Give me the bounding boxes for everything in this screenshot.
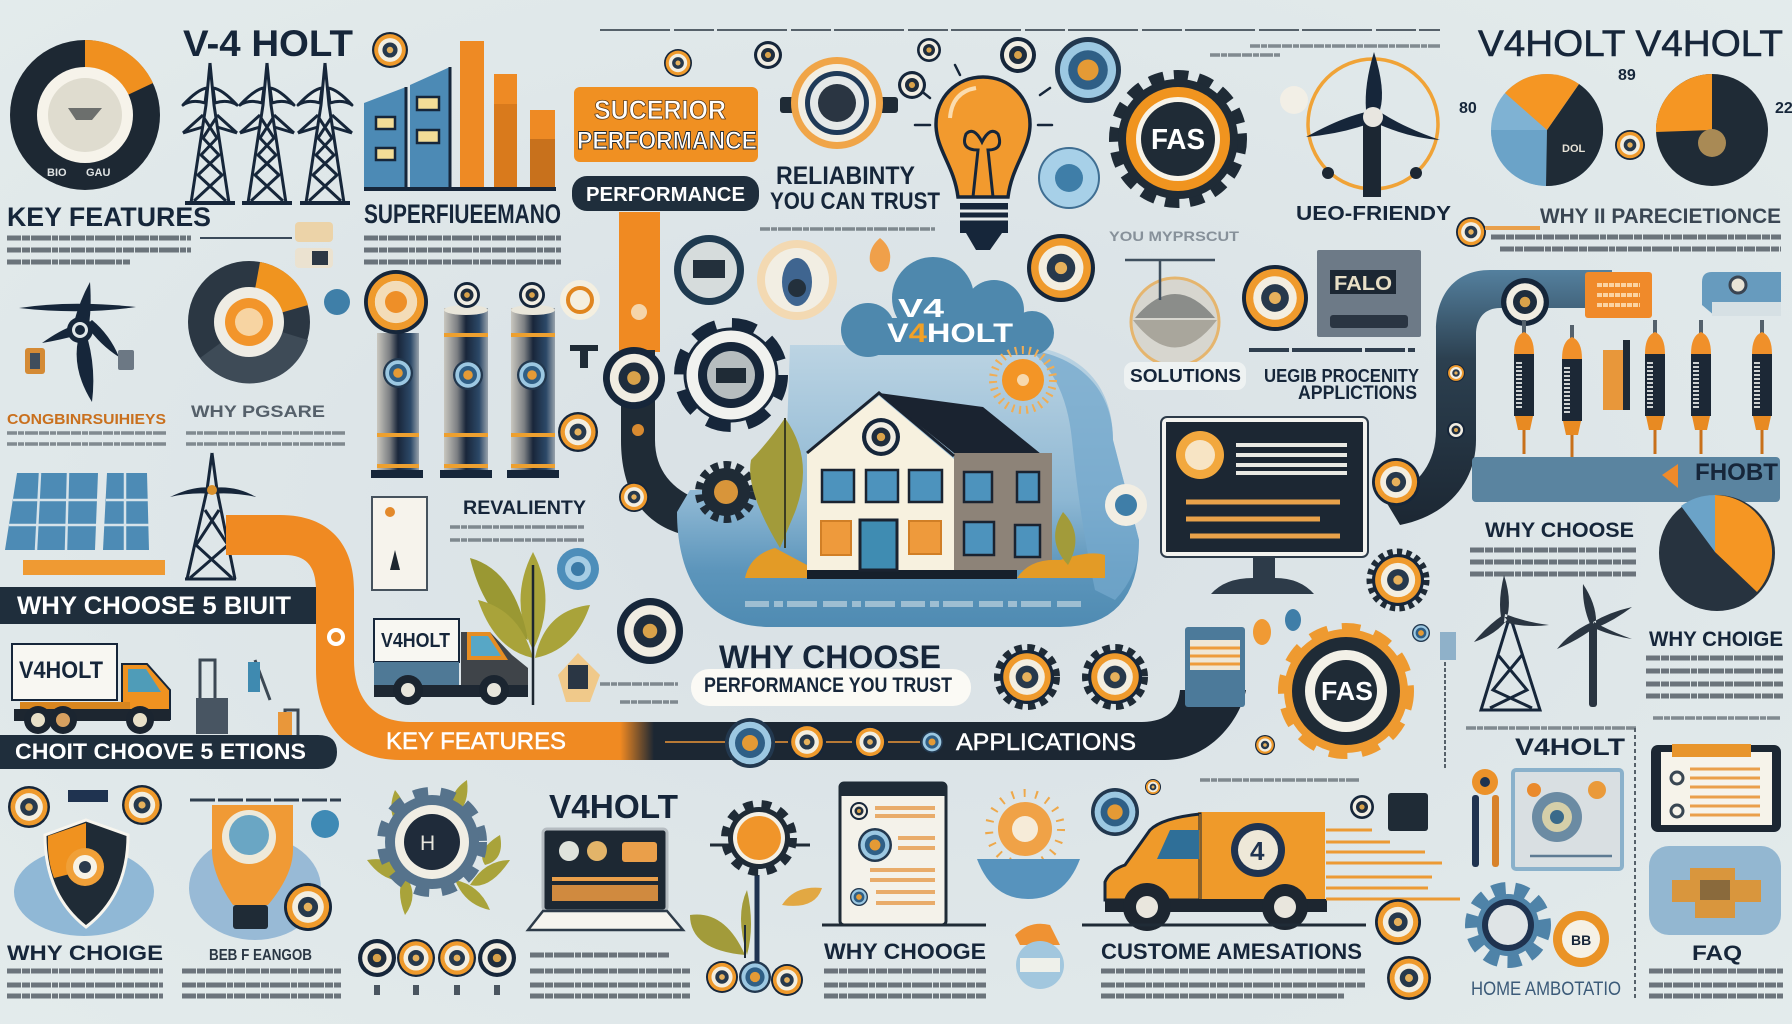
panel: shield — [8, 785, 162, 936]
arrow road: left dark curve — [621, 350, 700, 537]
panel: house background — [677, 345, 1139, 627]
icon: truck orange — [12, 644, 170, 734]
icon: FAS gear big — [1284, 629, 1408, 753]
heading: user applications — [1264, 366, 1419, 404]
heading: user applications: APPLICTIONS — [1298, 383, 1417, 404]
chart: pie three — [1659, 495, 1775, 611]
icon: road circles — [665, 718, 943, 768]
heading: why predictions — [1456, 205, 1781, 247]
chart: pie one: DOL — [1562, 143, 1586, 155]
panel: FALO box: FALO — [1334, 273, 1392, 295]
icon: house — [807, 393, 1052, 579]
heading: why choige left: WHY CHOIGE — [7, 942, 163, 965]
panel: superior block: PERFORMANCE — [577, 127, 757, 155]
icon: delivery van — [1082, 812, 1460, 931]
icon: plant — [470, 552, 590, 705]
icon: road marker — [327, 628, 345, 646]
icon: fuses row — [1514, 320, 1772, 459]
heading: V4HOLT V4HOLT: V4HOLT V4HOLT — [1478, 23, 1783, 64]
icon: light bulb — [915, 65, 1052, 250]
icon: ground shrubs — [745, 512, 1105, 578]
text block: laptop caption — [530, 955, 690, 996]
heading: why choose right: WHY CHOOSE — [1485, 519, 1634, 542]
text block: minor top notes — [1200, 46, 1440, 780]
chart: pie two — [1656, 74, 1768, 186]
panel: blue framed — [1513, 770, 1622, 869]
icon: top-right turbine — [1280, 52, 1440, 197]
icon: tools — [1472, 769, 1499, 867]
heading: V4HOLT small: V4HOLT — [1515, 734, 1625, 761]
icon: orange gear with stem — [710, 806, 810, 964]
label: solutions — [1124, 362, 1246, 390]
road gradient join — [620, 722, 654, 760]
panel: gear with leaves — [367, 780, 510, 915]
pill: performance: PERFORMANCE — [586, 184, 745, 206]
chart labels: numbers — [1459, 67, 1792, 160]
tag: orange — [1585, 272, 1652, 318]
icon: laptop — [528, 829, 683, 930]
icon: orange badge gear — [1553, 911, 1609, 967]
panel: monitor — [1161, 417, 1368, 594]
icon: olive leaf left — [750, 418, 803, 548]
icon: road badges — [603, 304, 665, 512]
pill: performance you trust: PERFORMANCE YOU TRUST — [704, 674, 952, 697]
heading: why pgsare: WHY PGSARE — [191, 402, 325, 421]
icon: truck blue — [374, 619, 528, 705]
icon: small panel badge — [1105, 484, 1147, 526]
label: home automation: HOME AMBOTATIO — [1471, 979, 1621, 1000]
heading: FAQ: FAQ — [1692, 942, 1742, 965]
text block: reliability note — [760, 227, 935, 231]
divider line — [1249, 348, 1415, 352]
panel: superior block — [574, 87, 758, 162]
label: V4 HOLT in cloud: V4 — [898, 293, 945, 323]
arrow road: orange — [226, 515, 632, 760]
icon: jar — [1015, 924, 1064, 989]
heading: customer annotations: CUSTOME AMESATIONS — [1101, 939, 1362, 964]
icon: blue gear — [1472, 889, 1544, 961]
heading: revalienty: REVALIENTY — [463, 498, 586, 519]
icon: orange badge gear: BB — [1571, 932, 1591, 948]
text block: panel caption — [745, 601, 1082, 607]
icon: pin — [558, 653, 600, 702]
chart: donut two — [188, 261, 310, 383]
icon: sun over water — [977, 793, 1080, 899]
panel: FALO box — [1317, 250, 1421, 337]
chart: pie one — [1491, 74, 1603, 186]
text block: orange subtitle — [7, 433, 166, 444]
icon: top badges — [664, 37, 1121, 208]
icon: dark plug — [570, 345, 598, 368]
icon: sun — [993, 350, 1053, 410]
label: V4 HOLT in cloud — [887, 293, 1014, 348]
dashed divider — [1634, 728, 1636, 1000]
icon: blue box — [1185, 627, 1245, 707]
icon: FAS gear big: FAS — [1321, 676, 1373, 706]
banner: blue holt — [1472, 457, 1780, 502]
panel: bulb — [189, 800, 341, 940]
icon: blue concentric — [557, 548, 599, 590]
icon: mid badges — [674, 234, 1095, 320]
text block: bulb panel — [182, 971, 341, 996]
label: V4 HOLT in cloud: V4HOLT — [887, 318, 1014, 348]
label: applications: APPLICATIONS — [956, 729, 1136, 756]
icon: tools cluster — [196, 660, 298, 745]
heading: why choige right: WHY CHOIGE — [1649, 628, 1783, 651]
icon: turbines right — [1440, 575, 1632, 770]
icon: badge left of heading — [617, 598, 683, 664]
icon: tower with blades — [170, 453, 256, 579]
icon: battery columns — [364, 270, 559, 474]
arrow road: blue-dark right — [1385, 270, 1612, 525]
icon: badge lower — [558, 412, 598, 452]
pill: performance you trust — [691, 669, 971, 706]
text block: why choige right — [1646, 658, 1783, 696]
heading: key features: KEY FEATURES — [7, 202, 211, 232]
icon: chip beside turbine — [25, 348, 134, 424]
icon: solar panels — [5, 473, 165, 575]
arrow road: left vertical orange — [619, 212, 660, 352]
heading: V4HOLT bottom: V4HOLT — [549, 788, 678, 825]
icon: wind turbine left — [19, 282, 136, 402]
icon: delivery van: 4 — [1250, 836, 1265, 866]
icon: tablet list — [822, 783, 986, 925]
icon: device medallion — [780, 57, 898, 149]
heading: orange subtitle: CONGBINRSUIHIEYS — [7, 411, 166, 428]
heading: user applications: UEGIB PROCENITY — [1264, 366, 1419, 386]
icon: blue device — [1702, 272, 1781, 316]
text block: superior — [364, 238, 561, 262]
text block: why choose bottom — [824, 971, 986, 996]
icon: dome solutions — [1125, 260, 1219, 366]
banner: why choose — [0, 587, 316, 624]
panel: gear with leaves: H — [420, 832, 435, 855]
heading: reliability: RELIABINTY — [776, 162, 915, 190]
heading: grey you: YOU MYPRSCUT — [1109, 228, 1240, 244]
icon: transmission towers — [183, 63, 352, 203]
icon: small around gear — [1253, 609, 1430, 755]
icon: FAS gear top: FAS — [1151, 124, 1205, 156]
icon: truck blue: V4HOLT — [381, 630, 450, 652]
label: solutions: SOLUTIONS — [1130, 366, 1241, 386]
icon: orange flame — [870, 238, 890, 272]
icon: badge beside FALO — [1242, 265, 1308, 331]
text block: why choose right — [1470, 550, 1636, 574]
icon: truck orange: V4HOLT — [19, 657, 103, 684]
text block: FAQ — [1649, 971, 1783, 996]
icon: gear badge right — [1371, 553, 1425, 607]
text block: customer annotations — [1101, 971, 1365, 996]
icon: small chips — [200, 222, 333, 268]
chart labels: numbers: 89 — [1618, 67, 1636, 84]
icon: side badges — [1350, 793, 1431, 1000]
heading: superfluemano: SUPERFIUEEMANO — [364, 199, 561, 229]
label: user friendly: UEO-FRIENDY — [1296, 203, 1452, 225]
banner: choose options: CHOIT CHOOVE 5 ETIONS — [15, 739, 306, 764]
text block: why pgsare — [186, 433, 345, 444]
heading: reliability: YOU CAN TRUST — [770, 188, 940, 215]
text block: small caption — [600, 684, 678, 702]
banner: blue holt: FHOBT — [1695, 459, 1778, 486]
panel: donut chart key features — [10, 40, 160, 190]
icon: clipboard — [1651, 744, 1781, 832]
panel: donut chart key features: GAU — [86, 167, 110, 179]
icon: blue blob — [324, 289, 350, 315]
chart: building and bars — [364, 41, 556, 191]
text block: key features — [7, 238, 191, 262]
banner: choose options — [0, 735, 337, 769]
icon: road badges right — [1372, 278, 1549, 506]
icon: FAS gear top — [1116, 77, 1240, 201]
heading: why predictions: WHY II PARECIETIONCE — [1540, 205, 1781, 228]
chart labels: numbers: 80 — [1459, 100, 1477, 117]
panel: arch right band — [1030, 350, 1139, 600]
top hairline — [600, 29, 1440, 31]
panel: blue with orange gizmo — [1649, 846, 1781, 935]
heading: why choose bottom: WHY CHOOGE — [824, 939, 986, 964]
text block: why choige left — [7, 971, 163, 996]
text block: predictions — [1491, 237, 1781, 249]
text block: V4HOLT small — [1466, 718, 1781, 728]
text block: revalienty — [450, 527, 584, 540]
heading: why choose center: WHY CHOOSE — [719, 639, 941, 675]
heading: V-4 HOLT: V-4 HOLT — [183, 23, 353, 64]
arrow road: dark bottom — [632, 690, 1246, 760]
icon: switch document — [372, 497, 427, 590]
icon: badge top — [560, 280, 600, 320]
icon: badges above van — [1091, 779, 1161, 836]
label: key features on road: KEY FEATURES — [386, 728, 566, 755]
panel: donut chart key features: BIO — [47, 167, 67, 179]
icon: gear badges — [999, 649, 1143, 705]
icon: badge row — [358, 939, 516, 995]
pill: performance — [572, 176, 759, 211]
banner: why choose: WHY CHOOSE 5 BIUIT — [17, 592, 291, 620]
icon: orange badge — [372, 32, 408, 68]
icon: dark gear — [700, 466, 752, 518]
panel: superior block: SUCERIOR — [594, 95, 726, 125]
heading: reliability — [770, 162, 940, 215]
icon: cloud — [841, 257, 1054, 357]
icon: leaf and seeds — [690, 888, 822, 996]
icon: gear white — [684, 328, 778, 422]
heading: best features small: BEB F EANGOB — [209, 947, 312, 964]
